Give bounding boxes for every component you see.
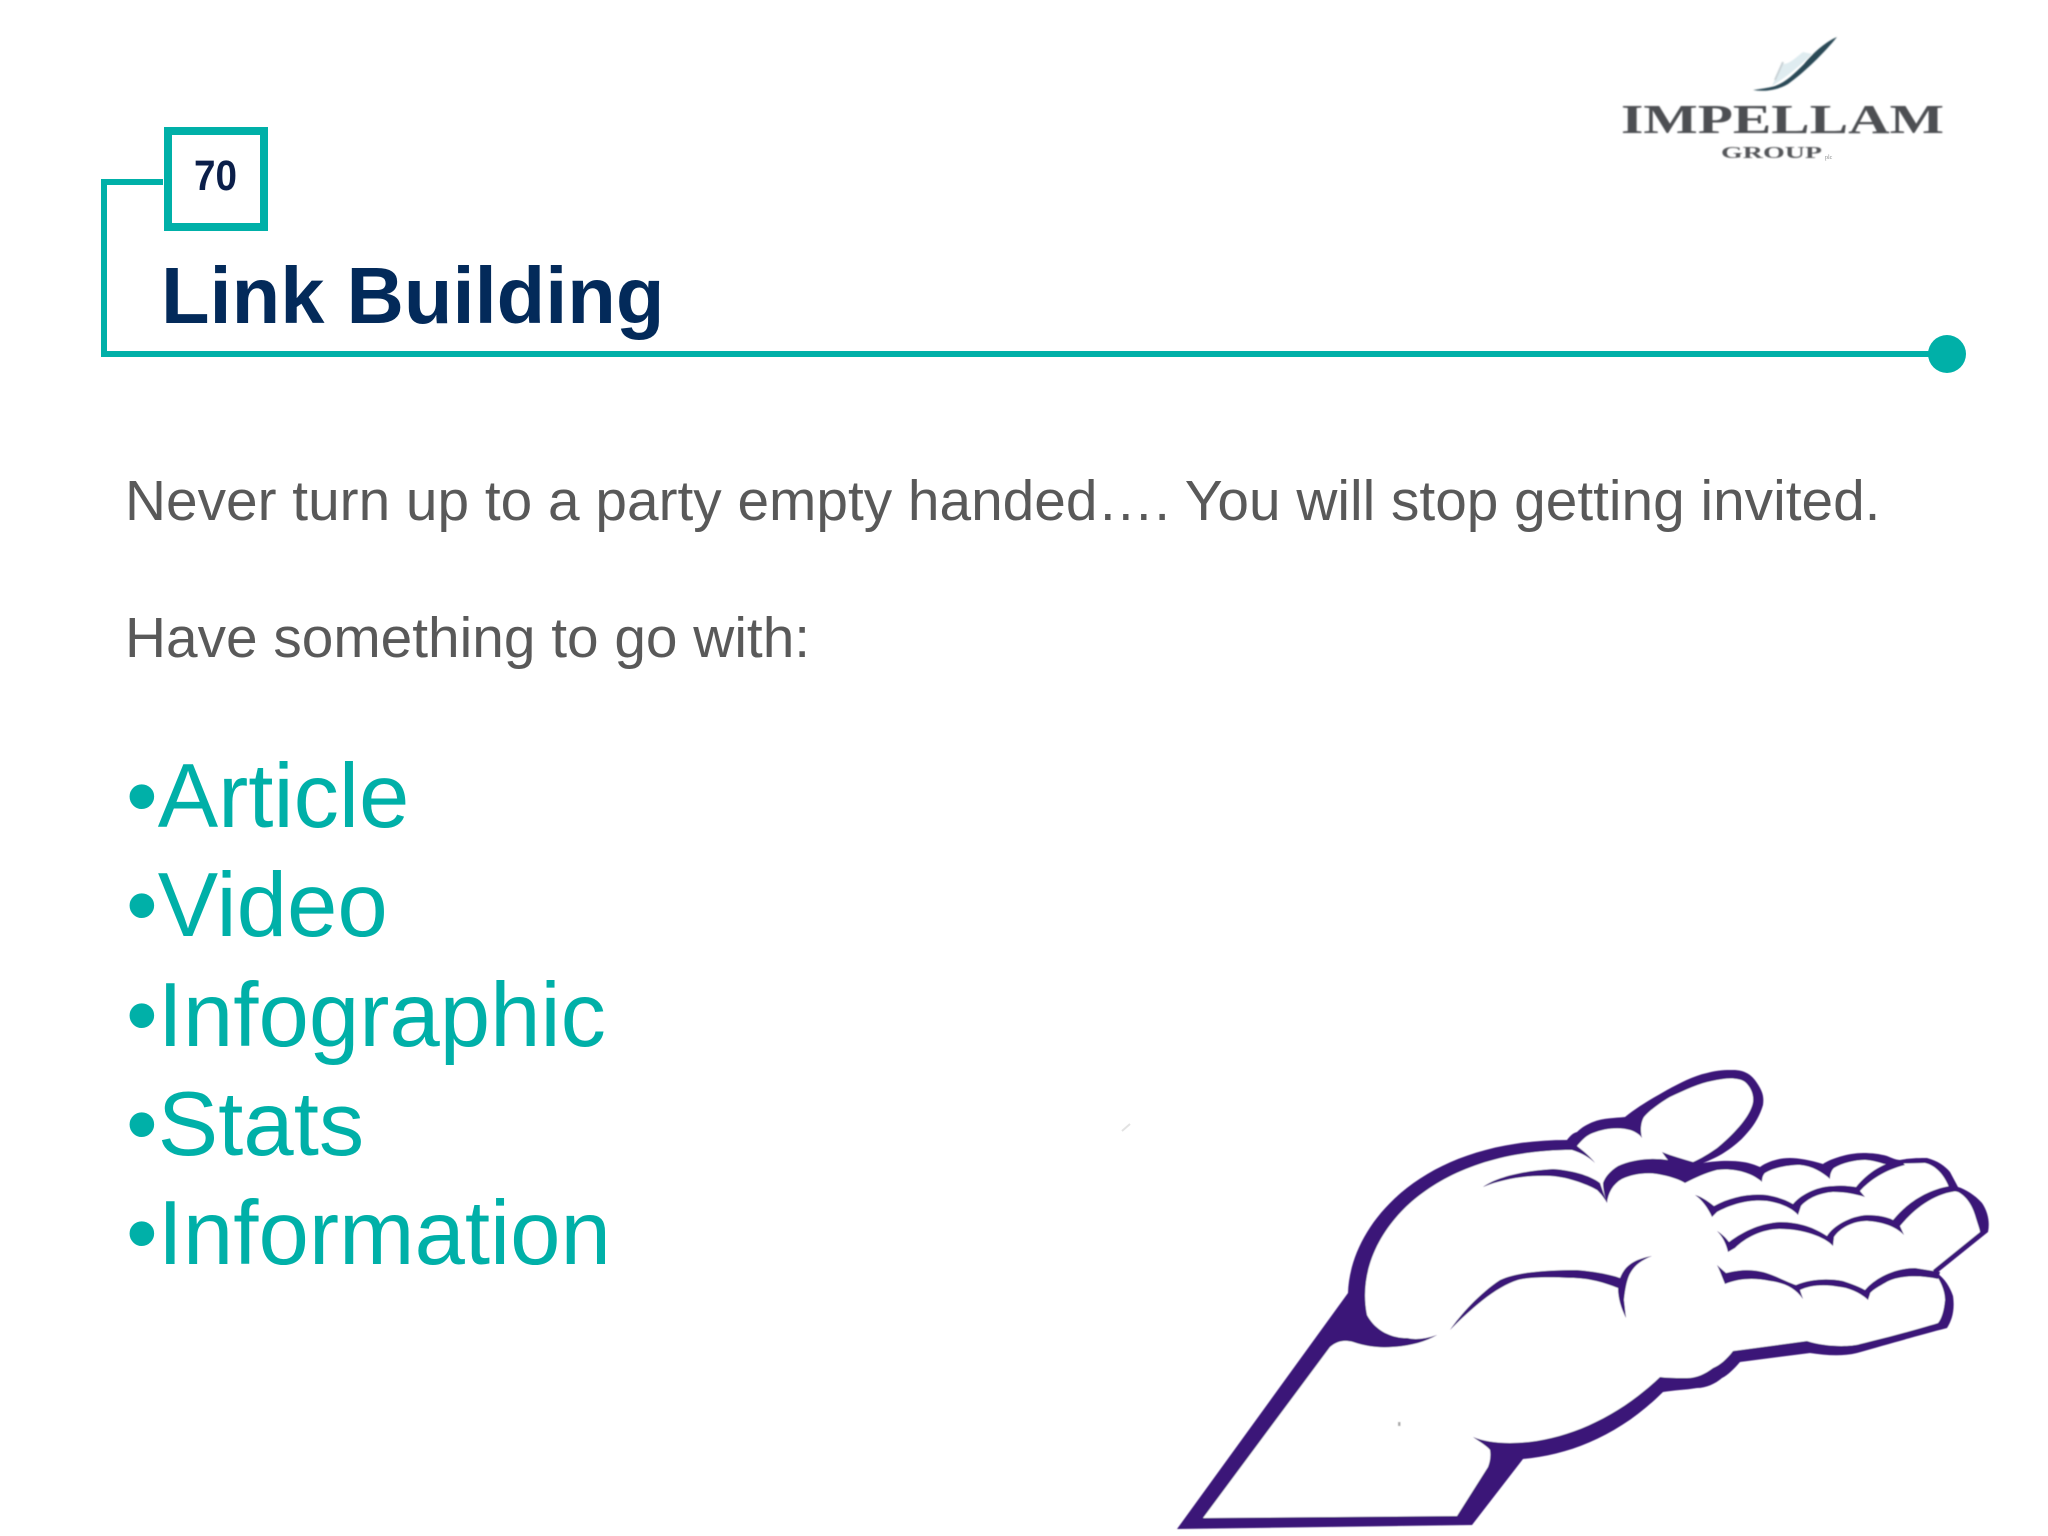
logo: Impellam Group	[1621, 37, 1944, 162]
bullet: Information: •Information	[126, 1183, 611, 1284]
logo subtitle: GROUP	[1721, 143, 1822, 162]
finger line: row three	[1717, 1265, 1940, 1300]
crease: upper palm	[1483, 1169, 1607, 1203]
intro sentence: Never turn up to a party empty handed…. You will stop getting invited.	[125, 470, 1880, 533]
finger line: row one	[1695, 1160, 1905, 1217]
palm creases and finger lines	[1450, 1160, 1958, 1330]
logo suffix: plc	[1825, 155, 1833, 161]
icon: feather	[1753, 37, 1837, 91]
rule end dot	[1928, 335, 1966, 373]
bullet: Stats: •Stats	[126, 1074, 364, 1175]
finger line: row two	[1717, 1186, 1958, 1252]
icon: open hand	[1177, 1070, 1989, 1529]
slide number: 70	[194, 152, 237, 200]
bullet: Article: •Article	[126, 746, 409, 847]
bullet list	[126, 746, 611, 1284]
logo wordmark: IMPELLAM	[1621, 96, 1944, 142]
header bracket and rule	[101, 182, 1966, 373]
hand interior	[1203, 1078, 1980, 1518]
bullet: Video: •Video	[126, 855, 388, 956]
hand outline	[1177, 1070, 1989, 1529]
sub heading: Have something to go with:	[125, 607, 810, 670]
faint speck left of hand	[1122, 1124, 1130, 1131]
crease: thenar	[1450, 1256, 1652, 1330]
title: Link Building	[161, 251, 664, 340]
faint speck on wrist	[1398, 1422, 1400, 1426]
slide number box	[168, 131, 264, 227]
bullet: Infographic: •Infographic	[126, 965, 606, 1066]
